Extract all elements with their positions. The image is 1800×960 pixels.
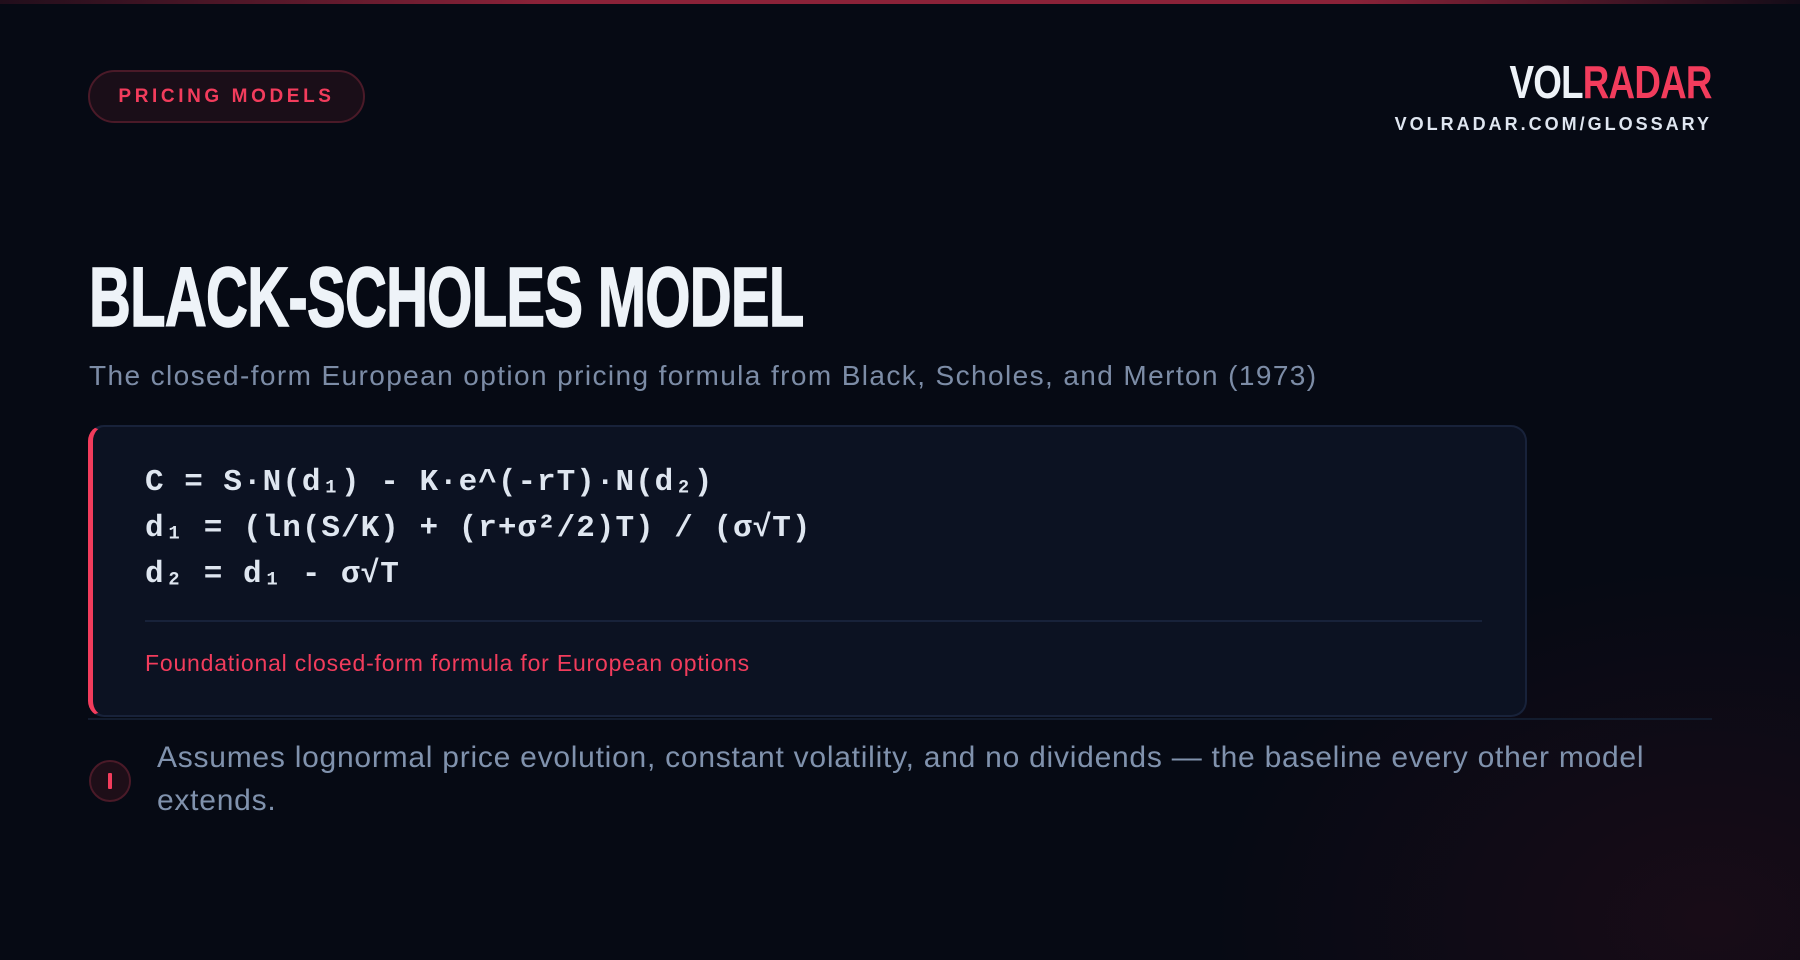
logo url: VOLRADAR.COM/GLOSSARY <box>1395 114 1712 134</box>
formula line 1: C = S·N(d₁) - K·e^(-rT)·N(d₂) <box>145 465 714 500</box>
category pill: PRICING MODELS <box>118 86 335 106</box>
logo wordmark: VOLRADAR <box>1510 56 1712 108</box>
panel: formula card <box>88 425 1527 717</box>
title: BLACK-SCHOLES MODEL <box>89 250 804 344</box>
body text: Assumes lognormal price evolution, constant volatility, and no dividends — the baseline every other model extends. <box>157 741 1644 817</box>
formula line 3: d₂ = d₁ - σ√T <box>145 557 400 592</box>
formula line 2: d₁ = (ln(S/K) + (r+σ²/2)T) / (σ√T) <box>145 511 812 546</box>
subtitle: The closed-form European option pricing formula from Black, Scholes, and Merton (1973) <box>89 360 1318 391</box>
logo <box>1394 56 1712 134</box>
category pill <box>88 70 365 123</box>
formula note: Foundational closed-form formula for European options <box>145 650 750 676</box>
icon: info <box>89 760 131 802</box>
